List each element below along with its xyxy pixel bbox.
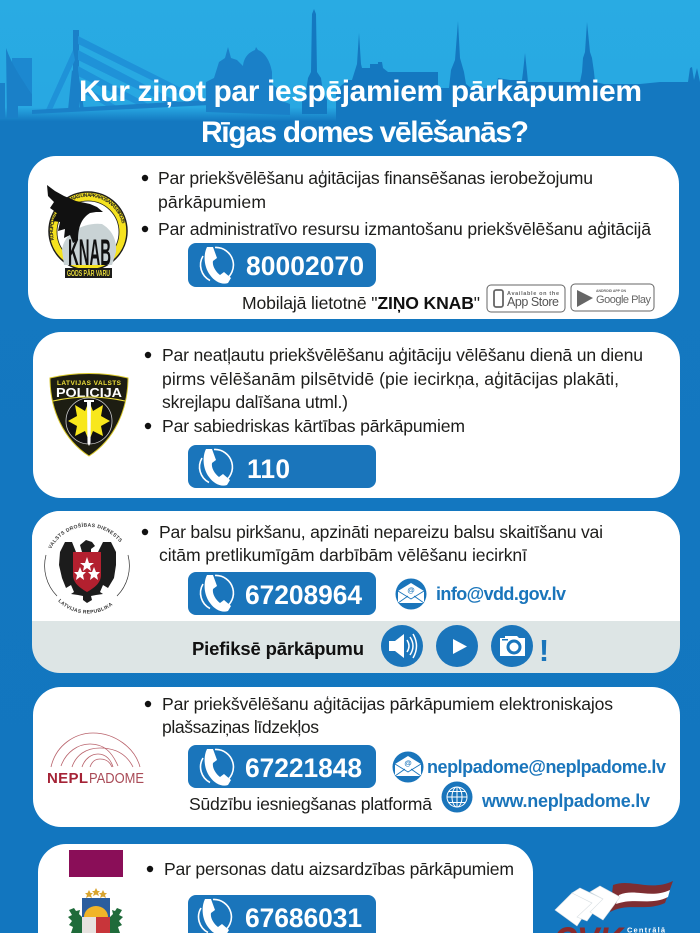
panel: NEPLP [33, 687, 680, 827]
bullet list: Par balsu pirkšanu, apzināti nepareizu balsu skaitīšanu vai [159, 522, 603, 542]
icon: email [396, 578, 426, 610]
email address: info@vdd.gov.lv [436, 584, 566, 604]
icon: email [392, 752, 424, 782]
mobile app line: Mobilajā lietotnē "ZIŅO KNAB" [242, 293, 480, 313]
logo: police shield: LATVIJAS VALSTS [57, 380, 122, 387]
exclamation mark: ! [539, 633, 549, 668]
phone: 110: 110 [247, 454, 290, 484]
phone: 67208964 [188, 572, 376, 615]
phone: 67208964: 67208964 [245, 580, 362, 610]
bullet list [145, 345, 643, 436]
phone: 80002070 [188, 243, 376, 287]
logo: KNAB: GODS PĀR VARU [67, 269, 110, 278]
logo: NEPLP: PADOME [89, 770, 144, 787]
icon: camera [491, 625, 533, 667]
house of blackheads [206, 47, 290, 115]
bullet list: Par neatļautu priekšvēlēšanu aģitāciju vēlēšanu dienā un dienu [162, 345, 643, 365]
panel: data protection [38, 844, 533, 933]
logo: KNAB: KNAB [68, 232, 111, 273]
bullet list [142, 522, 603, 565]
phone: 67686031: 67686031 [245, 903, 362, 933]
panel: KNAB [28, 156, 679, 319]
logo: NEPLP [47, 733, 144, 787]
badge: App Store: App Store [507, 295, 559, 309]
bullet list: citām pretlikumīgām darbībām vēlēšanu iecirknī [159, 545, 527, 565]
logo: KNAB: KORUPCIJAS NOVĒRŠANAS UN APKAROŠANAS BIROJS [50, 193, 126, 240]
right old town [336, 21, 700, 122]
icon: sound [381, 625, 423, 667]
email address: neplpadome@neplpadome.lv [427, 757, 666, 777]
phone: 67221848 [188, 745, 376, 788]
complaint platform label: Sūdzību iesniegšanas platformā [189, 794, 432, 814]
title: Kur ziņot par iespējamiem pārkāpumiem [79, 75, 642, 108]
bullet list: pārkāpumiem [158, 192, 266, 212]
badge: App Store [487, 285, 565, 312]
bullet list: Par priekšvēlēšanu aģitācijas pārkāpumiem elektroniskajos [162, 694, 613, 714]
logo: police shield [50, 374, 128, 456]
skyline: Riga silhouette [0, 9, 700, 122]
title: Rīgas domes vēlēšanās? [201, 116, 529, 149]
bullet list: Par administratīvo resursu izmantošanu priekšvēlēšanu aģitācijā [158, 219, 651, 239]
icon: globe [442, 782, 472, 812]
bullet list: pirms vēlēšanām pilsētvidē (pie iecirkņa, aģitācijas plakāti, [162, 369, 619, 389]
phone: 80002070: 80002070 [246, 251, 364, 281]
left towers [12, 58, 32, 94]
bullet list: plašsaziņas līdzekļos [162, 717, 319, 737]
maroon flag block [69, 850, 123, 877]
bullet text: Par personas datu aizsardzības pārkāpumiem [164, 859, 514, 879]
logo: VDD eagle [44, 522, 130, 614]
website: www.neplpadome.lv [481, 791, 650, 811]
logo: CVK [553, 881, 673, 933]
panel: VDD [32, 511, 680, 673]
logo: VDD eagle: VALSTS DROŠĪBAS DIENESTS [48, 522, 122, 548]
bullet list: Par sabiedriskas kārtības pārkāpumiem [162, 416, 465, 436]
phone: 67686031 [188, 895, 376, 933]
logo: VDD eagle: LATVIJAS REPUBLIKA [58, 598, 112, 614]
bullet list: skrejlapu dalīšana utml.) [162, 392, 348, 412]
bridge [45, 30, 205, 112]
logo: KNAB [47, 185, 128, 278]
phone: 110 [188, 445, 376, 488]
icon: play [436, 625, 478, 667]
badge: Google Play: ANDROID APP ON [596, 289, 626, 293]
panel: Police [33, 332, 680, 498]
report heading: Piefiksē pārkāpumu [192, 638, 364, 659]
title [79, 75, 642, 149]
logo: police shield: POLICIJA [56, 385, 123, 400]
bullet list [145, 694, 613, 737]
phone: 67221848: 67221848 [245, 753, 362, 783]
logo: NEPLP: NEPL [47, 770, 88, 787]
logo: coat of arms [68, 888, 123, 933]
badge: App Store: Available on the [507, 291, 559, 297]
badge: Google Play [571, 284, 654, 311]
bullet list [142, 168, 651, 239]
badge: Google Play: Google Play [596, 294, 652, 306]
bullet list: Par priekšvēlēšanu aģitācijas finansēšanas ierobežojumu [158, 168, 593, 188]
freedom monument [302, 9, 327, 114]
